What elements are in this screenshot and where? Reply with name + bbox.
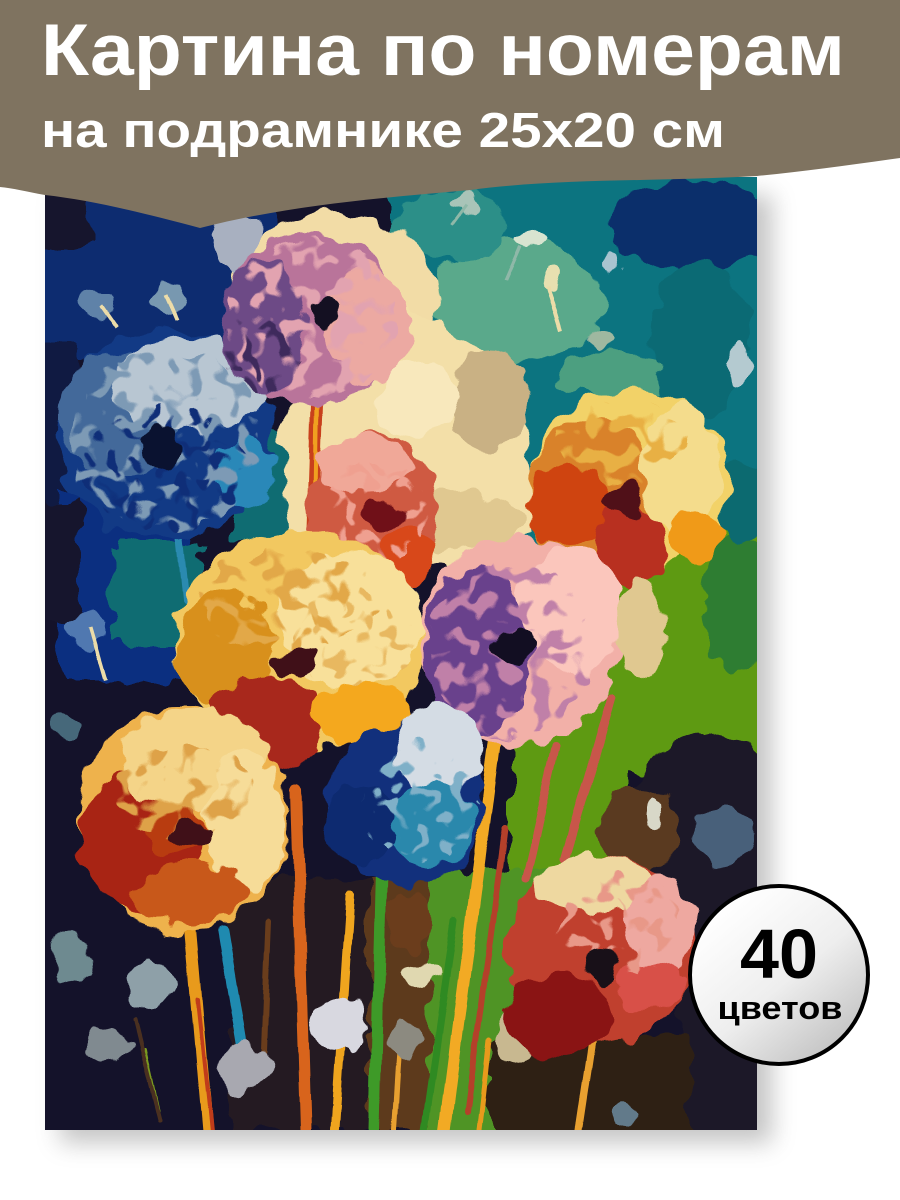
dandelion: blue-white small [325, 705, 485, 885]
dandelion: cream halo [210, 210, 535, 570]
badge: 40 colours: цветов [718, 990, 842, 1026]
badge: 40 colours [690, 886, 868, 1064]
badge: 40 colours: 40 [740, 915, 818, 993]
dandelion: top purple-pink [220, 236, 410, 404]
canvas shadow [60, 195, 772, 1143]
top banner [0, 0, 900, 228]
lower seed clusters [219, 890, 535, 1094]
dandelion: orange-yellow right [528, 388, 730, 587]
background seeds [50, 198, 755, 1127]
seed stalks [90, 205, 562, 680]
dandelion: small red-pink [310, 435, 440, 580]
dandelion: big yellow [175, 530, 425, 773]
dandelion: blue-white left [57, 330, 273, 540]
dandelion: red-pink low right [505, 855, 695, 1055]
dandelion: red-yellow low left [78, 708, 288, 932]
subtitle: на подрамнике 25х20 см [41, 104, 725, 158]
stems [135, 340, 612, 1130]
background colour fields [45, 177, 757, 1130]
painting: dandelions on canvas [45, 177, 757, 1130]
title: Картина по номерам [41, 10, 845, 91]
dandelion: purple-pink center [420, 535, 665, 745]
